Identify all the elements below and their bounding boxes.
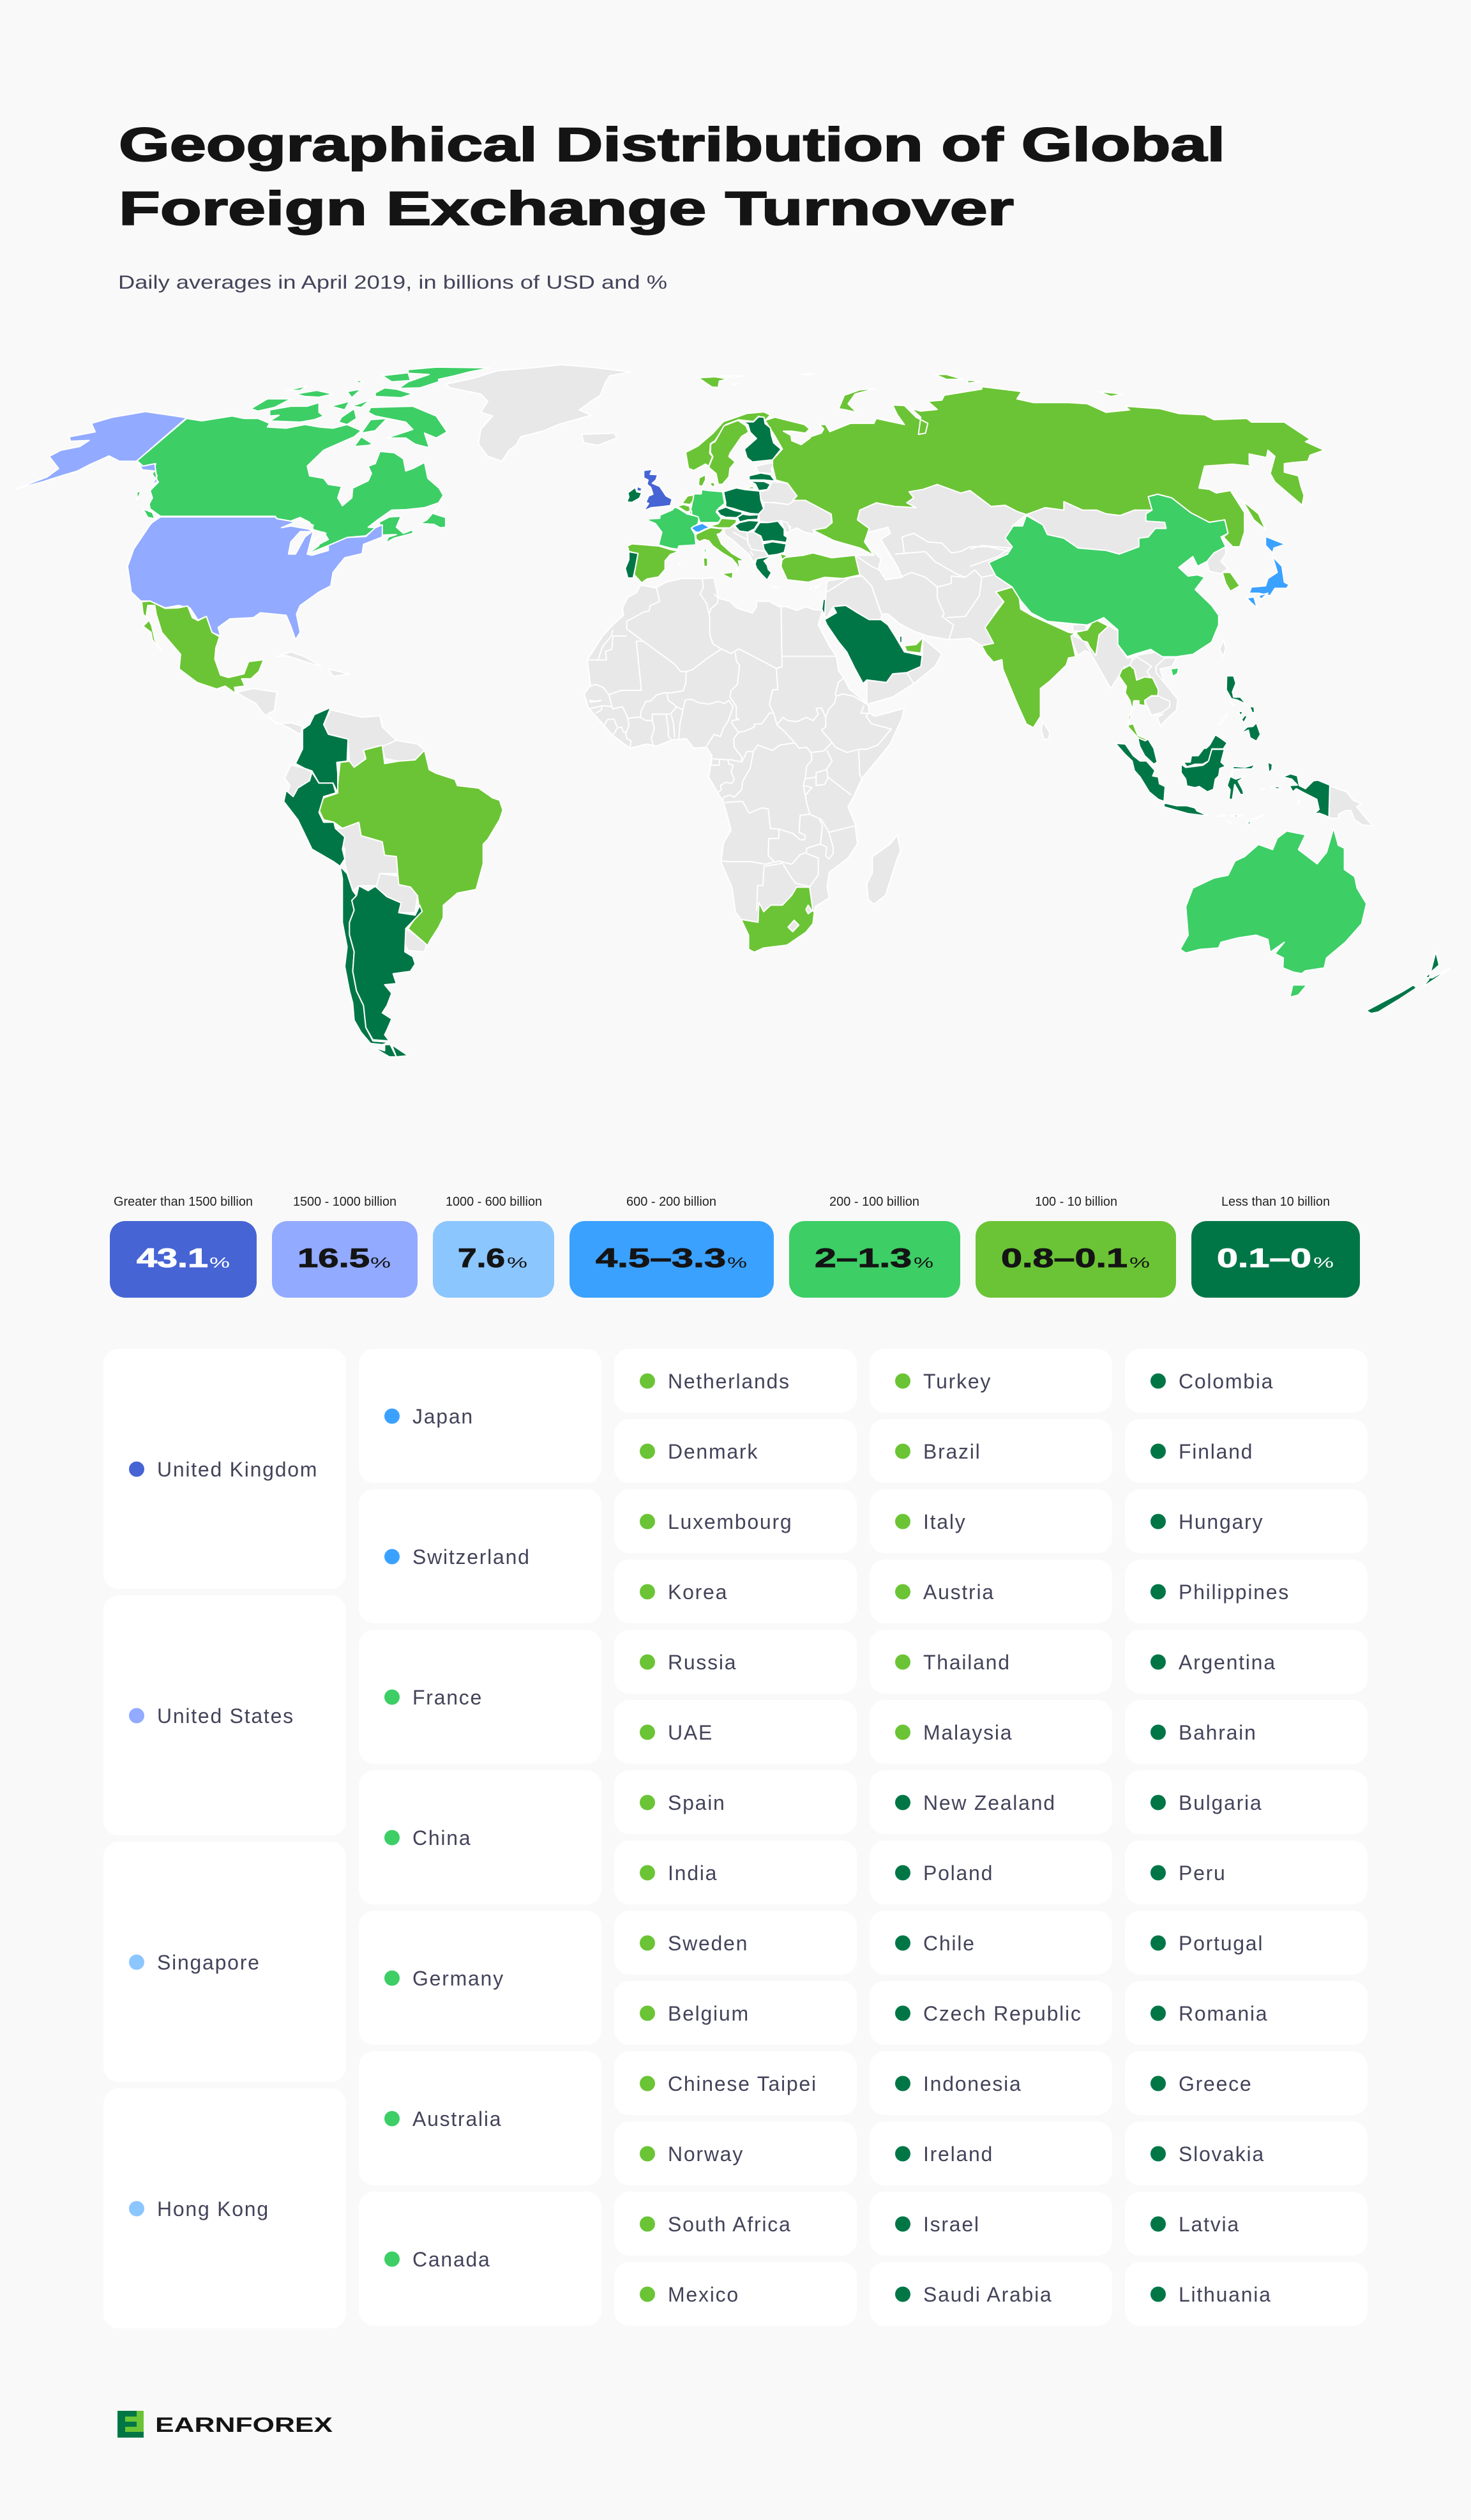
legend: 2-1.3%: % (914, 1254, 933, 1271)
card: Chinese Taipei (614, 2051, 857, 2115)
map: New Zealand (1366, 952, 1449, 1013)
map: Canada (137, 367, 490, 554)
legend labels: Less than 10 billion (1221, 1195, 1330, 1209)
card: United Kingdom (103, 1349, 346, 1589)
legend: 0.8-0.1% (976, 1221, 1176, 1298)
card: Romania: Romania (1179, 2002, 1268, 2025)
card: Sweden: Sweden (668, 1932, 748, 1955)
map: Mexico (142, 601, 264, 694)
legend labels: 200 - 100 billion (829, 1195, 919, 1209)
card: Finland: Finland (1179, 1440, 1253, 1463)
card: Switzerland (359, 1489, 601, 1623)
map: Thailand (1119, 665, 1158, 741)
card: Singapore (103, 1842, 346, 2082)
card: India (614, 1841, 857, 1904)
card: Ireland: Ireland (923, 2143, 993, 2166)
card: South Africa (614, 2192, 857, 2256)
card: Slovakia: Slovakia (1179, 2143, 1265, 2166)
card: Turkey: Turkey (923, 1370, 992, 1393)
card: France (359, 1630, 601, 1764)
world map (17, 365, 1449, 1057)
map: Caspian Sea (864, 528, 902, 580)
card: Korea (614, 1560, 857, 1623)
legend: 2-1.3%: 2–1.3 (815, 1243, 912, 1273)
card: Spain (614, 1770, 857, 1834)
card: Bulgaria: Bulgaria (1179, 1791, 1262, 1814)
card: Mexico (614, 2262, 857, 2326)
card: United Kingdom: United Kingdom (157, 1458, 318, 1481)
card: Israel (870, 2192, 1112, 2256)
card: Greece: Greece (1179, 2072, 1252, 2095)
card: Belgium: Belgium (668, 2002, 750, 2025)
card: Russia: Russia (668, 1651, 737, 1674)
card: Chinese Taipei: Chinese Taipei (668, 2072, 817, 2095)
legend: 4.5-3.3%: % (727, 1254, 747, 1271)
card: Malaysia: Malaysia (923, 1721, 1013, 1744)
card: Portugal: Portugal (1179, 1932, 1264, 1955)
card: Thailand: Thailand (923, 1651, 1011, 1674)
map: Australia (1180, 828, 1366, 998)
title (119, 118, 1225, 235)
legend: 16.5%: 16.5 (298, 1243, 370, 1273)
card: Indonesia (870, 2051, 1112, 2115)
card: Luxembourg: Luxembourg (668, 1510, 792, 1533)
map: Japan (1247, 536, 1289, 608)
card: Germany (359, 1911, 601, 2045)
card: New Zealand (870, 1770, 1112, 1834)
legend labels: 600 - 200 billion (626, 1195, 716, 1209)
map: Great Lakes (282, 520, 328, 556)
title: Foreign Exchange Turnover (119, 182, 1014, 235)
card: Saudi Arabia (870, 2262, 1112, 2326)
legend: 7.6% (433, 1221, 554, 1298)
card: Indonesia: Indonesia (923, 2072, 1022, 2095)
subtitle: Daily averages in April 2019, in billions of USD and % (118, 272, 667, 293)
card: Turkey (870, 1349, 1112, 1413)
map: grey landmasses of Africa (584, 578, 904, 952)
card: Australia: Australia (412, 2107, 502, 2130)
card: Hungary (1125, 1489, 1368, 1553)
card: Austria (870, 1560, 1112, 1623)
country cards (129, 1370, 1290, 2306)
card: China (359, 1770, 601, 1904)
card: Switzerland: Switzerland (412, 1545, 531, 1568)
title: Geographical Distribution of Global (119, 118, 1225, 171)
card: Austria: Austria (923, 1581, 995, 1604)
card: Czech Republic: Czech Republic (923, 2002, 1082, 2025)
legend: 0.1-0%: 0.1–0 (1217, 1243, 1311, 1273)
card: India: India (668, 1862, 718, 1885)
card: Saudi Arabia: Saudi Arabia (923, 2283, 1052, 2306)
card: South Africa: South Africa (668, 2213, 792, 2236)
map: Brazil (319, 745, 503, 946)
card: Hong Kong: Hong Kong (157, 2197, 269, 2220)
card: Peru: Peru (1179, 1862, 1226, 1885)
legend: 2-1.3% (789, 1221, 960, 1298)
card: Israel: Israel (923, 2213, 980, 2236)
card: Denmark: Denmark (668, 1440, 758, 1463)
card: Belgium (614, 1981, 857, 2045)
card: Hong Kong (103, 2088, 346, 2328)
map: United States (17, 412, 382, 640)
card: Peru (1125, 1841, 1368, 1904)
map: grey South East Asia and Papua New Guinea (1130, 651, 1373, 826)
map: Greenland, Iceland and Central America (237, 365, 631, 734)
card: Ireland (870, 2122, 1112, 2185)
card: Hungary: Hungary (1179, 1510, 1264, 1533)
map: Lesotho and Eswatini (788, 905, 812, 932)
legend: 4.5-3.3%: 4.5–3.3 (596, 1243, 726, 1273)
card: Norway (614, 2122, 857, 2185)
legend: 43.1%: % (209, 1254, 230, 1271)
card: Spain: Spain (668, 1791, 726, 1814)
map: grey Eastern Europe and Balkans (723, 462, 832, 590)
card: Malaysia (870, 1700, 1112, 1764)
card: Bulgaria (1125, 1770, 1368, 1834)
card: Brazil: Brazil (923, 1440, 981, 1463)
card: Poland (870, 1841, 1112, 1904)
map: grey South American countries (285, 710, 427, 952)
card: Singapore: Singapore (157, 1951, 260, 1974)
map: Switzerland (691, 523, 710, 532)
map: France and Germany (648, 490, 725, 554)
map: Western European lime-green countries (628, 374, 814, 583)
card: Sweden (614, 1911, 857, 1975)
card: United States: United States (157, 1704, 294, 1727)
map: Madagascar (867, 721, 1050, 904)
card: Bahrain (1125, 1700, 1368, 1764)
card: Brazil (870, 1419, 1112, 1483)
card: Canada (359, 2192, 601, 2326)
legend labels (114, 1195, 1330, 1209)
map: European dark-green countries (625, 417, 787, 588)
card: Chile (870, 1911, 1112, 1975)
card: China: China (412, 1826, 471, 1849)
card: Netherlands (614, 1349, 857, 1413)
legend: 16.5% (272, 1221, 418, 1298)
legend: 43.1%: 43.1 (137, 1243, 208, 1273)
card: Italy (870, 1489, 1112, 1553)
map: United Kingdom (637, 469, 672, 511)
card: Lithuania (1125, 2262, 1368, 2326)
card: UAE: UAE (668, 1721, 713, 1744)
card: Lithuania: Lithuania (1179, 2283, 1272, 2306)
card: Finland (1125, 1419, 1368, 1483)
legend: 7.6%: % (507, 1254, 527, 1271)
card: Colombia (1125, 1349, 1368, 1413)
map: South Africa (741, 887, 814, 952)
card: Chile: Chile (923, 1932, 976, 1955)
card: Bahrain: Bahrain (1179, 1721, 1257, 1744)
card: New Zealand: New Zealand (923, 1791, 1056, 1814)
card: Greece (1125, 2051, 1368, 2115)
map: China (989, 494, 1228, 676)
legend: 4.5-3.3% (570, 1221, 774, 1298)
legend: 0.8-0.1%: 0.8–0.1 (1001, 1243, 1128, 1273)
legend labels: 1000 - 600 billion (446, 1195, 542, 1209)
card: Mexico: Mexico (668, 2283, 739, 2306)
logo icon (117, 2411, 144, 2438)
card: Portugal (1125, 1911, 1368, 1975)
logo wordmark: EARNFOREX (155, 2413, 333, 2436)
legend: 0.1-0%: % (1313, 1254, 1334, 1271)
map: grey Asia (824, 485, 1228, 715)
card: Germany: Germany (412, 1967, 504, 1990)
card: Denmark (614, 1419, 857, 1483)
legend: 43.1% (110, 1221, 257, 1298)
card: Norway: Norway (668, 2143, 744, 2166)
card: Latvia: Latvia (1179, 2213, 1240, 2236)
card: Poland: Poland (923, 1862, 993, 1885)
card: United States (103, 1595, 346, 1835)
card: Argentina: Argentina (1179, 1651, 1276, 1674)
card: France: France (412, 1686, 483, 1709)
card: Japan (359, 1349, 601, 1483)
card: Netherlands: Netherlands (668, 1370, 790, 1393)
map: Russia, India, Turkey, Korea, Sakhalin (765, 374, 1324, 727)
card: Italy: Italy (923, 1510, 966, 1533)
legend labels: 1500 - 1000 billion (293, 1195, 396, 1209)
legend: 0.1-0% (1191, 1221, 1360, 1298)
legend: 16.5%: % (370, 1254, 391, 1271)
card: UAE (614, 1700, 857, 1764)
card: Philippines: Philippines (1179, 1581, 1290, 1604)
legend labels: 100 - 10 billion (1035, 1195, 1117, 1209)
card: Romania (1125, 1981, 1368, 2045)
card: Latvia (1125, 2192, 1368, 2256)
card: Japan: Japan (412, 1405, 474, 1428)
map: Colombia, Peru, Chile, Argentina (283, 708, 422, 1057)
card: Colombia: Colombia (1179, 1370, 1274, 1393)
card: Australia (359, 2051, 601, 2185)
legend: 7.6%: 7.6 (458, 1243, 505, 1273)
card: Canada: Canada (412, 2248, 491, 2271)
card: Czech Republic (870, 1981, 1112, 2045)
card: Luxembourg (614, 1489, 857, 1553)
card: Russia (614, 1630, 857, 1694)
map: Indonesia, Malaysia, Philippines (1115, 676, 1330, 824)
map: Saudi Arabia, Qatar, Israel (822, 599, 922, 683)
card: Thailand (870, 1630, 1112, 1694)
legend labels: Greater than 1500 billion (114, 1195, 253, 1209)
card: Slovakia (1125, 2122, 1368, 2185)
card: Philippines (1125, 1560, 1368, 1623)
card: Korea: Korea (668, 1581, 728, 1604)
card: Argentina (1125, 1630, 1368, 1694)
legend: 0.8-0.1%: % (1129, 1254, 1150, 1271)
